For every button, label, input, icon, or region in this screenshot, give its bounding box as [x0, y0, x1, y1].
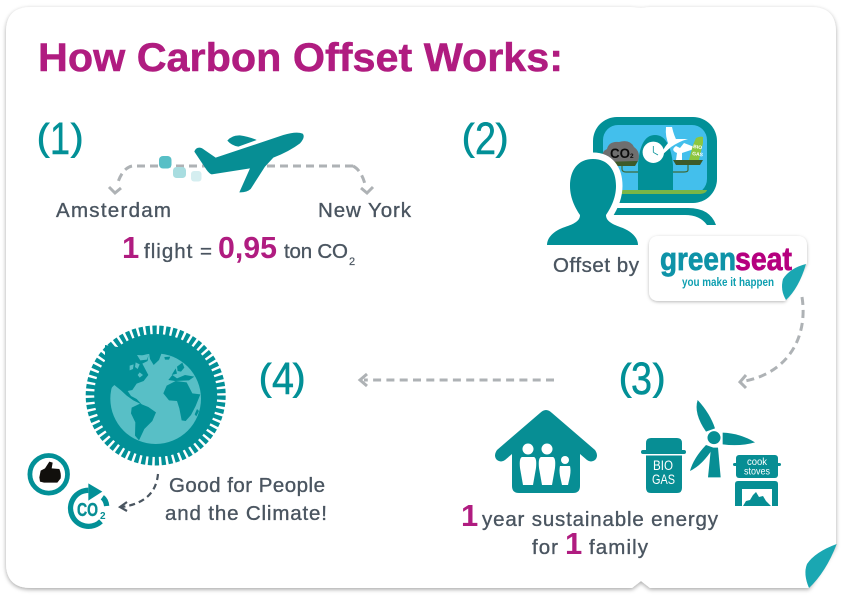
flight emission figure: flight =: [144, 240, 212, 263]
icon: CO2 cycle: 2: [100, 511, 106, 522]
city label: Amsterdam: Amsterdam: [56, 199, 171, 222]
title: How Carbon Offset Works:: [38, 36, 563, 80]
icon: computer monitor: [593, 117, 717, 225]
panel: step 4 climate: [30, 330, 327, 526]
label: Offset by: Offset by: [553, 254, 640, 277]
greenseat logo badge: you make it happen: [682, 275, 774, 289]
benefit text: Good for People: [169, 474, 325, 497]
scale arms and pans: [612, 160, 703, 172]
step number 1: (: [37, 117, 50, 158]
energy text line 2: 1: [565, 526, 582, 561]
CO2 cloud: 2: [630, 153, 634, 160]
icon: page corner peel: [805, 544, 837, 588]
icon: CO2 cycle: [71, 483, 107, 526]
panel: step 1 flight: [37, 113, 412, 268]
arrow: climate to icons: [120, 474, 158, 511]
flight emission figure: 0,95: [218, 230, 277, 265]
arrow: step 3 to step 4: [360, 374, 554, 386]
step number 1: [37, 113, 83, 164]
CO2 cloud: [602, 141, 639, 162]
greenseat logo badge: green: [660, 241, 736, 277]
step number 3: [619, 353, 665, 404]
icon: family house: [495, 410, 597, 493]
biogas bag: BIO: [693, 144, 702, 151]
energy text line 2: family: [589, 536, 649, 559]
step number 2: (: [462, 117, 475, 158]
biogas bag: GAS: [692, 151, 704, 159]
icon: biogas tank: BIO: [653, 458, 673, 473]
icon: biogas tank: [641, 438, 686, 493]
panel: step 3 energy: [461, 353, 781, 561]
step number 3: 3: [631, 353, 652, 404]
flight emission figure: 2: [349, 256, 355, 268]
step number 1: 1: [50, 113, 70, 164]
scale pillar: [638, 135, 673, 190]
white wind turbines: [661, 127, 697, 160]
step number 4: (: [259, 357, 272, 398]
greenseat logo badge: [649, 236, 807, 301]
flight emission figure: [122, 230, 355, 268]
greenseat logo badge: seat: [735, 241, 792, 277]
step number 3: (: [619, 357, 632, 398]
step number 4: 4: [272, 353, 294, 404]
step number 4: ): [293, 357, 305, 398]
energy text line 1: [461, 498, 719, 533]
CO2 cloud: CO: [610, 145, 630, 161]
clock: [643, 142, 664, 163]
energy text line 2: for: [532, 536, 558, 559]
icon: wind turbine: [690, 400, 755, 477]
energy text line 1: 1: [461, 498, 478, 533]
biogas bag: [689, 137, 704, 160]
icon: biogas tank: GAS: [652, 472, 675, 487]
step number 2: [462, 113, 508, 164]
step number 2: 2: [475, 113, 496, 164]
benefit text: and the Climate!: [165, 502, 327, 525]
emission clouds: [159, 156, 202, 182]
flight route dashed arrows: [109, 166, 373, 193]
step number 4: [259, 353, 305, 404]
city label: New York: New York: [318, 199, 412, 222]
step number 2: ): [496, 117, 508, 158]
icon: person silhouette: [547, 159, 638, 245]
icon: cook stove: stoves: [744, 466, 770, 478]
icon: cook stove: [733, 455, 781, 506]
icon: cook stove: cook: [747, 457, 768, 468]
flight emission figure: 1: [122, 230, 139, 265]
icon: airplane: [194, 133, 304, 192]
flight emission figure: ton CO: [284, 240, 348, 263]
icon: CO2 cycle: CO: [77, 500, 98, 520]
step number 1: ): [71, 117, 83, 158]
panel: step 2 offset: [462, 113, 807, 301]
energy text line 1: year sustainable energy: [482, 508, 719, 531]
energy text line 2: [532, 526, 649, 561]
icon: globe: [90, 330, 221, 461]
arrow: badge to step 3: [740, 297, 803, 388]
icon: thumbs up: [30, 456, 68, 493]
benefit text: [165, 474, 327, 525]
step number 3: ): [653, 357, 665, 398]
